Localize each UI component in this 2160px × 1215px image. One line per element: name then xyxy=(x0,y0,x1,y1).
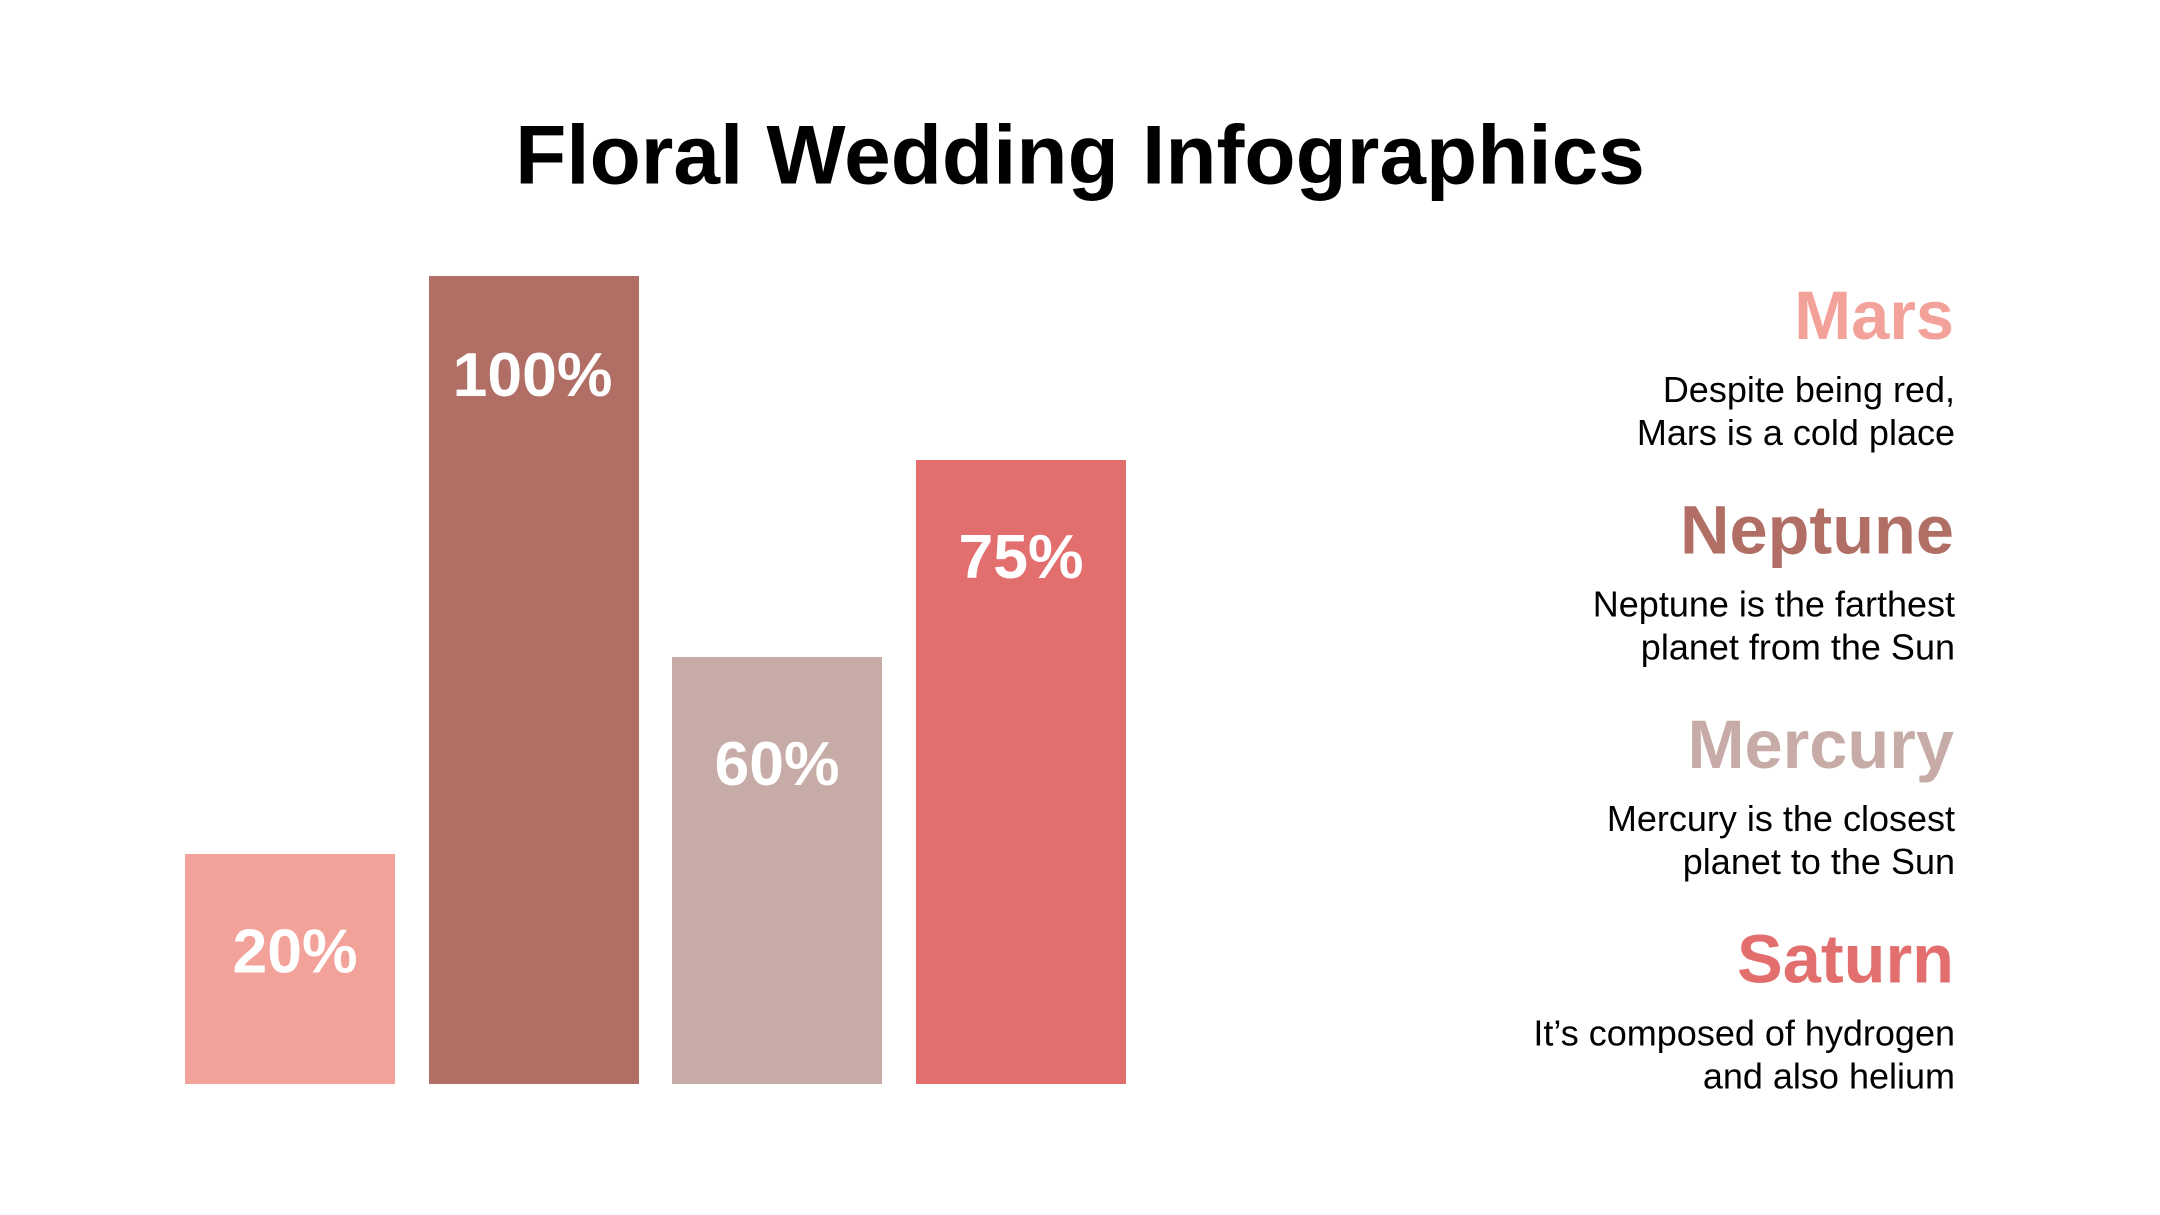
legend item: Mercury: Mercury is the closest xyxy=(1607,798,1955,839)
legend item: Neptune xyxy=(1593,492,1955,668)
bar: 75% xyxy=(916,460,1126,1084)
legend item: Saturn: and also helium xyxy=(1703,1056,1955,1096)
legend item: Saturn: It’s composed of hydrogen xyxy=(1533,1012,1955,1054)
legend item: Mercury xyxy=(1607,706,1955,882)
bar: 20% xyxy=(185,854,395,1084)
legend item: Saturn xyxy=(1533,920,1955,1096)
bar: 60%: 60% xyxy=(714,729,840,799)
legend item: Mars: Despite being red, xyxy=(1663,369,1955,410)
legend item: Neptune: Neptune xyxy=(1680,492,1954,568)
title: Floral Wedding Infographics xyxy=(515,108,1645,202)
legend item: Mercury: Mercury xyxy=(1687,706,1954,783)
bar: 75%: 75% xyxy=(958,522,1084,592)
legend item: Mercury: planet to the Sun xyxy=(1683,841,1955,882)
bar chart xyxy=(185,276,1126,1084)
legend xyxy=(1533,277,1955,1096)
legend item: Mars: Mars xyxy=(1794,277,1954,354)
legend item: Mars: Mars is a cold place xyxy=(1637,412,1955,453)
bar: 20%: 20% xyxy=(232,916,358,986)
legend item: Mars xyxy=(1637,277,1955,453)
bar: 100% xyxy=(429,276,639,1084)
legend item: Neptune: planet from the Sun xyxy=(1641,626,1955,668)
bar: 100%: 100% xyxy=(453,340,612,410)
legend item: Saturn: Saturn xyxy=(1737,920,1954,998)
bar: 60% xyxy=(672,657,882,1084)
legend item: Neptune: Neptune is the farthest xyxy=(1593,584,1955,624)
